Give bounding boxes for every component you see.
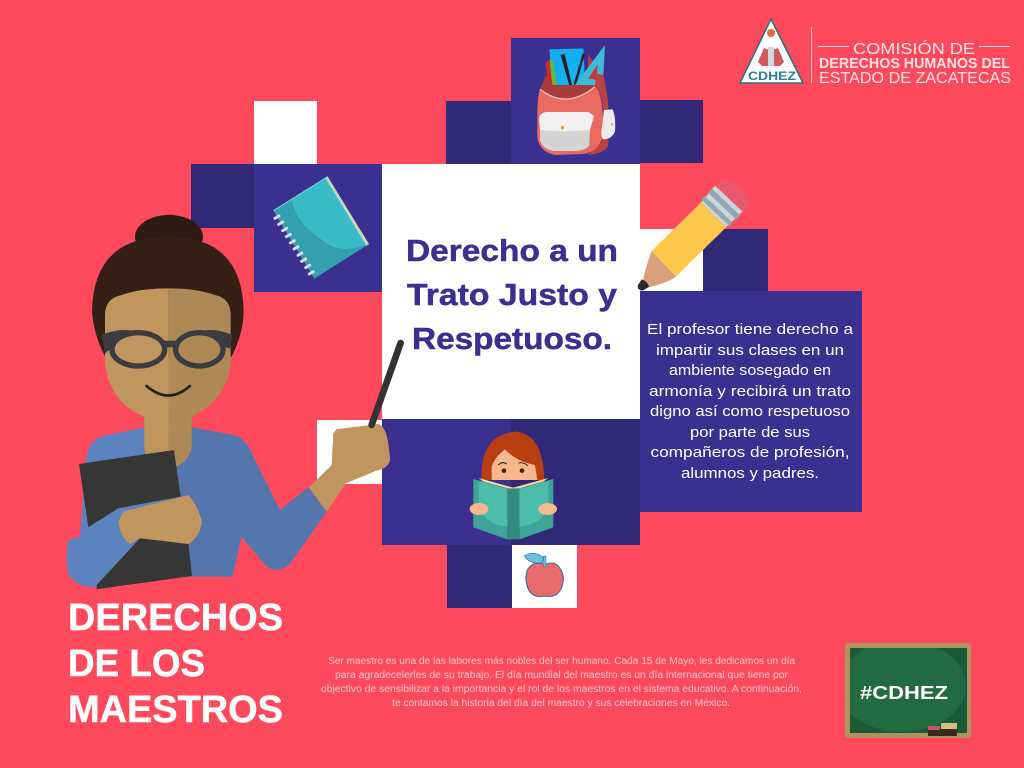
chalkboard hashtag xyxy=(838,640,971,738)
intro text block: objectivo de sensibilizar a la importancia y el rol de los maestros en el sistema educativo. A continuación, xyxy=(321,684,802,695)
logo text: Comisión de Derechos Humanos: COMISIÓN DE xyxy=(853,39,975,58)
panel: description text xyxy=(640,291,862,512)
icon: backpack xyxy=(537,45,615,155)
main title: DE LOS xyxy=(68,643,205,685)
logo text: Comisión de Derechos Humanos: DERECHOS HUMANOS DEL xyxy=(819,56,1010,72)
intro text block: te contamos la historia del día del maestro y sus celebraciones en México. xyxy=(392,698,730,709)
panel: description text: El profesor tiene derecho a xyxy=(647,321,854,338)
panel: description text: alumnos y padres. xyxy=(681,465,819,482)
icon: notebook xyxy=(273,177,369,279)
panel: description text: armonía y recibirá un trato xyxy=(649,383,851,400)
icon: child reading a book xyxy=(470,432,557,539)
panel: central heading: Trato Justo y xyxy=(407,277,618,312)
intro text block: para agradecelerles de su trabajo. El día mundial del maestro es un día internacional que tiene por xyxy=(335,670,789,681)
panel: description text: impartir sus clases en un xyxy=(656,342,844,359)
illustration: teacher xyxy=(67,215,401,589)
intro text block: Ser maestro es una de las labores más nobles del ser humano. Cada 15 de Mayo, les dedicamos un día xyxy=(328,656,795,667)
icon: pencil xyxy=(638,180,748,291)
panel: description text: ambiente sosegado en xyxy=(669,362,831,379)
panel: central heading xyxy=(382,164,640,419)
intro text block xyxy=(321,656,802,709)
panel: central heading: Respetuoso. xyxy=(412,321,612,356)
panel: description text: por parte de sus xyxy=(690,424,810,441)
mosaic of colour squares xyxy=(191,38,768,608)
icon: apple xyxy=(524,553,563,596)
main title: DERECHOS xyxy=(68,597,283,639)
panel: description text: compañeros de profesión, xyxy=(650,444,850,461)
logo text: Comisión de Derechos Humanos: ESTADO DE ZACATECAS xyxy=(819,70,1011,87)
panel: description text: digno así como respetuoso xyxy=(650,403,850,420)
logo: CDHEZ: CDHEZ xyxy=(748,69,796,83)
main title: MAESTROS xyxy=(68,689,283,731)
panel: central heading: Derecho a un xyxy=(406,233,618,268)
chalkboard hashtag: #CDHEZ xyxy=(860,682,948,703)
logo: CDHEZ xyxy=(740,19,803,83)
logo text: Comisión de Derechos Humanos xyxy=(811,27,1011,87)
main title xyxy=(68,597,283,731)
